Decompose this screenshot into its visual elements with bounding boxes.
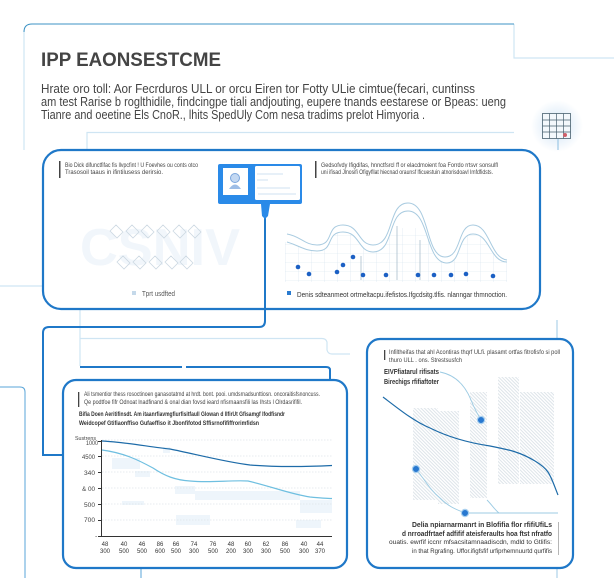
- y axis labels: 1000: [86, 441, 99, 447]
- right legend: Denis sdteanmeot ortmeltacpu.ifefistos.Ifgcdsitg.tlfis. nlanngar thmnoction.: [297, 290, 507, 299]
- right aligned note: Delia npiarnarmanrt in Blofifia flor rfifiUfiLs: [412, 520, 552, 529]
- background frame lines: [0, 24, 614, 366]
- right aligned note: [389, 520, 559, 555]
- panel description: Ali tsmentior thess rosoctinoen ganasotatrnd at hrdt. bont. pooi. umdsrnadsunttiosn. oncoraitisfsnoncuss.: [84, 391, 320, 398]
- icon: grid table: [531, 100, 583, 152]
- left legend: Tprt usdfted: [142, 291, 175, 298]
- diamond icon rows: [110, 225, 201, 269]
- panel bold note: Weidcopef Gtifiaonffiso Gufaeffiso it Jbonfifotod Sffisrnofififfrorimfidsn: [79, 420, 259, 427]
- panel bold note: [384, 367, 439, 386]
- x axis labels: 60: [245, 542, 252, 548]
- pale area patches: [112, 447, 332, 528]
- x axis labels: 300: [100, 549, 111, 555]
- panel bold note: EIVFfiatarul rifisats: [384, 367, 439, 376]
- icon: ID card badge: [218, 164, 302, 219]
- panel description: Qe podtfoe fifr Odnoat lnadfinand & onal dian fovsd ieard nfisrnaansfili las Ihsts l Olrdasrififil.: [84, 399, 302, 406]
- panel bold note: [79, 411, 285, 427]
- x axis labels: 300: [189, 549, 200, 555]
- x axis labels: 500: [137, 549, 148, 555]
- x axis labels: 300: [261, 549, 272, 555]
- x axis labels: 40: [301, 542, 308, 548]
- x axis labels: 46: [139, 542, 146, 548]
- panel description: [384, 349, 560, 364]
- panel description: thuro ULL . ons. Strestsusfch: [389, 357, 462, 364]
- hatched bars: [413, 377, 554, 504]
- x axis labels: 200: [226, 549, 237, 555]
- connector: card to lower chart panel: [43, 204, 265, 455]
- x axis labels: 86: [157, 542, 164, 548]
- left description: [59, 161, 198, 178]
- intro text block: am test Rarise b roglthidile, findcingpe tiali andjouting, eupere tnands eestarese or Bpeas: ueng: [41, 95, 506, 109]
- wave chart: [285, 203, 507, 282]
- panel: scatter and trend: [367, 339, 573, 568]
- panel: top overview: [43, 150, 540, 309]
- x axis labels: [100, 542, 326, 555]
- panel bold note: Birechigs rfifiaftoter: [384, 377, 439, 386]
- y axis labels: 700: [84, 517, 95, 524]
- y axis labels: 340: [84, 470, 95, 477]
- x axis labels: 370: [315, 549, 326, 555]
- x axis labels: 500: [280, 549, 291, 555]
- x axis labels: 300: [299, 549, 310, 555]
- gridlines: [102, 440, 332, 520]
- x axis labels: 62: [263, 542, 270, 548]
- page frame top: [24, 24, 514, 32]
- left legend: [132, 291, 175, 298]
- right aligned note: d nrroadfrtaef adfifif ateisferaults hoa ftst nfratfo: [402, 531, 552, 538]
- panel: line chart: [63, 380, 347, 568]
- y axis labels: -: [95, 533, 97, 540]
- title: IPP EAONSESTCME: [41, 50, 221, 71]
- y axis labels: Sustrens: [75, 436, 96, 442]
- x axis labels: 76: [210, 542, 217, 548]
- y axis labels: & 00: [82, 486, 95, 493]
- intro text block: Tianre and oeetine Els CnoR., lhits SpedUly Com nesa tradims prelot Himyoria .: [41, 108, 425, 122]
- axes: [98, 440, 332, 536]
- intro text block: [41, 82, 506, 122]
- x axis labels: 500: [119, 549, 130, 555]
- x axis labels: 600: [155, 549, 166, 555]
- right description: [315, 161, 498, 178]
- y axis labels: 500: [84, 502, 95, 509]
- trend curve: [383, 397, 558, 495]
- intro text block: Hrate oro toll: Aor Fecrduros ULL or orcu Eiren tor Fotty ULie cimtue(fecari, cuntinss: [41, 82, 475, 96]
- x axis labels: 48: [228, 542, 235, 548]
- panel bold note: Bifia Doen Aeritifinsdt. Am itaanrfiavmgfiurfisitfaull Glowan d lIfirUt Gfisamgf Ifodfisndr: [79, 411, 285, 418]
- series dark: [102, 441, 332, 467]
- x axis labels: 66: [173, 542, 180, 548]
- watermark: CSNIV: [80, 219, 240, 277]
- panel description: Infiltheifas that ahl Acontiras thqrf ULfi. plasamt ortfas fitrofisfo si poll: [389, 349, 560, 356]
- x axis labels: 40: [121, 542, 128, 548]
- annotation dots: [412, 416, 485, 517]
- decorative lower lines: [0, 320, 557, 578]
- x axis labels: 300: [243, 549, 254, 555]
- x axis labels: 44: [317, 542, 324, 548]
- x axis labels: 48: [102, 542, 109, 548]
- x axis labels: 74: [191, 542, 198, 548]
- y axis labels: [75, 436, 99, 540]
- right description: uni ifisad Jlnosifi Ofigyfllat hiecnad oraunsf lficuestuin atnorisdoavl Imfdfidsts.: [321, 169, 493, 176]
- x axis labels: 500: [171, 549, 182, 555]
- panel description: [78, 391, 320, 407]
- left description: Bio Dick difunctfifac fis llvpcfint ! U Foevhes ou conts otco: [65, 162, 198, 169]
- y axis labels: 4500: [82, 454, 95, 461]
- x axis labels: 500: [208, 549, 219, 555]
- right aligned note: in that Rgrafing. Uffor.ifigfsfif urfiprhemnuurtd qurfifis: [412, 548, 552, 555]
- left description: Trasosoil taaus in ifintilusess derirsio.: [65, 169, 163, 176]
- right aligned note: ouatis. ewrfif iccnr mfsacsitamnaadiscdn, mdld to Gtlifis:: [389, 539, 552, 546]
- x axis labels: 86: [282, 542, 289, 548]
- right description: Gedsofvdy Ifigdifas, hnnctfsrcl ff or elacdmoient foa Forrdo rrtsvr sonsulfl: [321, 162, 498, 169]
- annotation curves: [416, 372, 558, 513]
- series light: [102, 450, 332, 498]
